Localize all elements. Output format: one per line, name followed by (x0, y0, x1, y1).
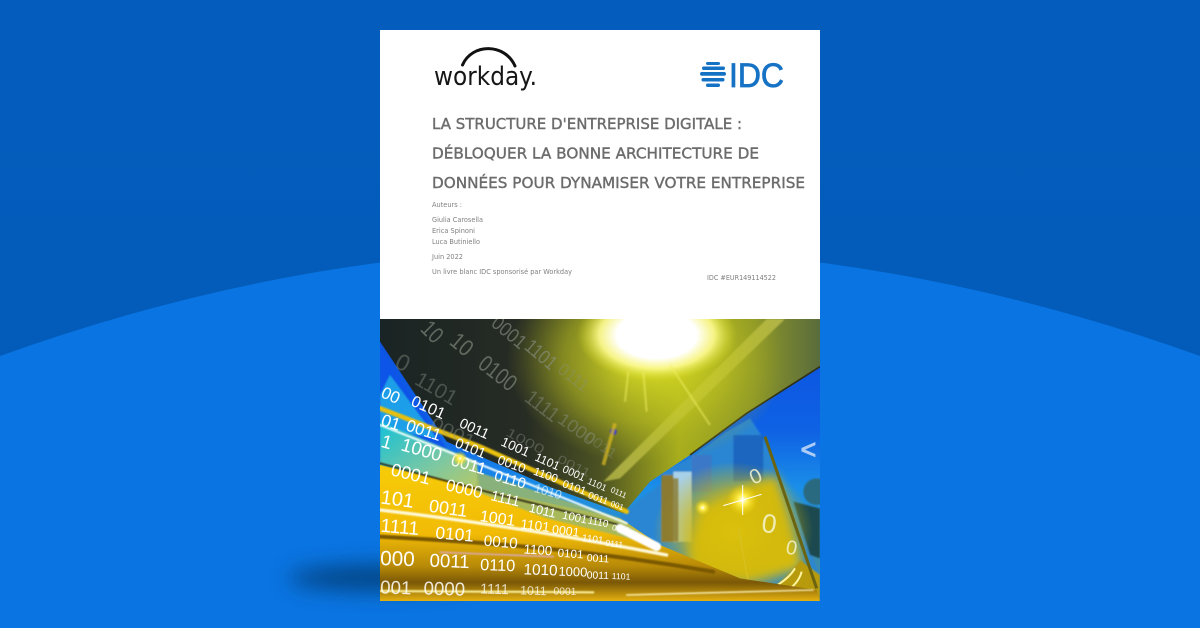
cover white panel (380, 30, 820, 320)
white binary digit rows: 0001 (551, 522, 580, 540)
white binary digit rows: 0101 (408, 393, 448, 423)
white binary digit rows: 0000 (423, 577, 465, 600)
white binary digit rows: 0001 (389, 459, 433, 489)
white binary digit rows: 0101 (453, 436, 488, 462)
faint binary digits on the bridge: 0001 (487, 311, 531, 353)
white binary digit rows: 0011 (449, 451, 489, 479)
white binary digit rows: 1011 (528, 501, 557, 521)
white binary digit rows: 0011 (611, 522, 631, 535)
authors and details: Un livre blanc IDC sponsorisé par Workday (432, 268, 572, 276)
white binary digit rows: 1101 (581, 533, 604, 547)
report cover (378, 30, 830, 602)
logo: IDC: IDC (729, 57, 784, 95)
white binary digit rows: 1100 (523, 541, 553, 558)
building overlay on glow (662, 478, 678, 542)
title (432, 115, 805, 192)
authors and details: Luca Butiniello (432, 238, 480, 246)
title: DÉBLOQUER LA BONNE ARCHITECTURE DE (432, 144, 759, 162)
white binary digit rows: 0111 (605, 538, 624, 550)
white binary digit rows: 1000 (558, 564, 588, 580)
white binary digit rows: 0011 (586, 490, 610, 508)
white binary digit rows: 0101 (561, 478, 588, 498)
floating digits at right: < (801, 434, 816, 464)
cover photo: data streams and city (380, 319, 820, 601)
white binary digit rows: 0000 (444, 475, 484, 502)
white binary digit rows: 1101 (520, 516, 551, 535)
logo: Workday (434, 49, 537, 92)
white binary digit rows: 1101 (612, 571, 631, 582)
faint binary digits on the bridge: 0111 (554, 359, 593, 396)
faint binary digits on the bridge: 0011 (582, 429, 620, 462)
white binary digit rows: 00 (378, 383, 403, 408)
faint binary digits on the bridge: 1101 (521, 335, 561, 374)
white binary digit rows: 1101 (533, 450, 562, 473)
title: DONNÉES POUR DYNAMISER VOTRE ENTREPRISE (432, 173, 805, 192)
white binary digit rows: 1111 (480, 581, 509, 598)
white binary digit rows: 0101 (557, 547, 584, 561)
authors and details: Giulia Carosella (432, 216, 483, 224)
authors and details: Auteurs : (432, 201, 462, 209)
white binary digit rows: 0001 (560, 463, 587, 484)
white binary digit rows: 000 (380, 547, 415, 571)
white binary digit rows: 101 (379, 486, 415, 513)
city buildings (620, 418, 830, 602)
faint binary digits on the bridge (396, 319, 616, 477)
faint binary digits on the bridge: 0011 (555, 453, 593, 480)
white binary digit rows: 01 (379, 410, 403, 435)
faint binary digits on the bridge: 1000 (503, 426, 547, 457)
faint binary digits on the bridge: 10 (445, 327, 479, 362)
white binary digit rows: 001 (380, 576, 412, 598)
authors and details: IDC #EUR149114522 (707, 274, 776, 282)
white binary digit rows: 0110 (492, 468, 528, 493)
faint binary digits on the bridge: 10 (415, 316, 448, 349)
white binary digit rows: 1110 (587, 515, 610, 530)
white binary digit rows: 0110 (480, 556, 516, 575)
faint binary digits on the bridge: 0001 (428, 413, 478, 450)
white binary digit rows: 1001 (499, 434, 532, 460)
white binary digit rows: 001 (609, 499, 625, 512)
white binary digit rows: 1010 (523, 561, 558, 580)
white binary digit rows: 1011 (520, 583, 547, 598)
yellow city glow (690, 475, 803, 582)
white binary digit rows: 1101 (586, 476, 608, 493)
bridge edge (690, 367, 820, 455)
background: light blue dome (0, 248, 1200, 628)
floating digits at right: 0 (746, 464, 766, 490)
golden light streak field (380, 465, 820, 602)
faint binary digits on the bridge: 0100 (473, 351, 522, 397)
white binary digit rows: 0101 (435, 522, 475, 546)
white binary digit rows: 0010 (496, 452, 528, 476)
white binary digit rows: 1001 (479, 508, 516, 530)
white binary digit rows: 0001 (553, 586, 577, 598)
logo: Workday: workday. (434, 62, 537, 92)
white binary digit rows: 0011 (587, 570, 609, 582)
title: LA STRUCTURE D'ENTREPRISE DIGITALE : (432, 115, 742, 133)
faint binary digits on the bridge: 1000 (554, 409, 599, 449)
globe stripes (700, 62, 726, 87)
faint binary digits on the bridge: 1111 (520, 386, 564, 427)
floating digits at right: 0 (784, 537, 799, 560)
left blue wedge and cyan band (380, 375, 480, 488)
faint binary digits on the bridge: 1101 (411, 368, 461, 410)
white binary digit rows (378, 383, 631, 600)
authors and details (431, 201, 776, 282)
white binary digit rows: 1 (379, 430, 395, 453)
cover drop shadow (288, 565, 472, 591)
sky (380, 318, 820, 602)
white binary digit rows: 0011 (428, 496, 469, 521)
white binary digit rows: 1111 (489, 488, 521, 510)
white binary digit rows: 1111 (380, 516, 420, 540)
white binary digit rows: 0011 (404, 416, 444, 445)
faint binary digits on the bridge: 0 (391, 348, 415, 377)
road light trails at lower right (776, 560, 820, 601)
white binary digit rows: 0111 (609, 485, 628, 500)
light streaks (380, 408, 813, 595)
floating digits at right: 0 (760, 508, 779, 540)
white binary digit rows: 1000 (399, 434, 445, 465)
sparkles (453, 451, 762, 516)
sun flare (514, 319, 772, 466)
white binary digit rows: 1010 (533, 481, 563, 502)
white binary digit rows: 0011 (586, 553, 610, 566)
bridge underside (380, 318, 820, 513)
white binary digit rows: 0010 (483, 533, 518, 553)
pylon (765, 437, 817, 588)
white binary digit rows: 0011 (429, 550, 470, 572)
bridge beam (603, 319, 785, 482)
floating digits at right (750, 442, 816, 555)
white binary digit rows: 1100 (532, 465, 560, 486)
authors and details: Juin 2022 (431, 253, 463, 261)
authors and details: Erica Spinoni (432, 227, 475, 235)
white binary digit rows: 0011 (457, 416, 491, 443)
logo: IDC (700, 57, 784, 95)
white binary digit rows: 1001 (561, 510, 588, 527)
